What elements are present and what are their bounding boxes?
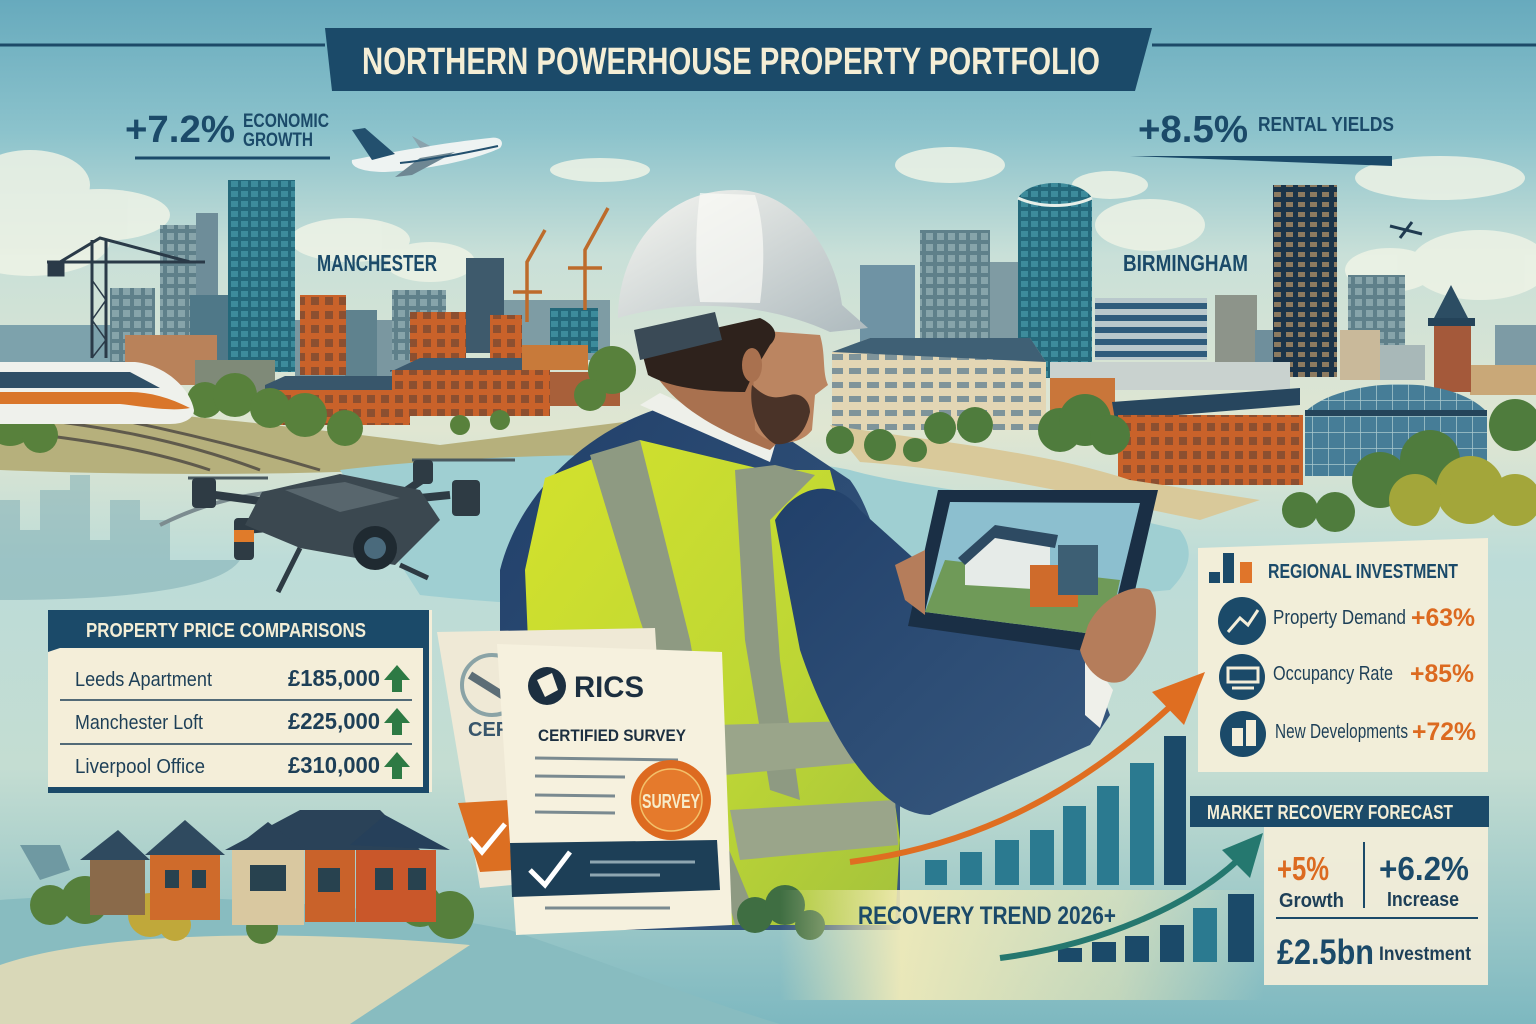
Birmingham skyline [826,183,1536,532]
title banner: NORTHERN POWERHOUSE PROPERTY PORTFOLIO [362,41,1100,83]
stat: economic growth [125,109,330,158]
bar chart: lower bars [1058,894,1254,962]
label: Manchester: MANCHESTER [317,250,437,276]
stat: economic growth: ECONOMIC [243,111,329,132]
stat: economic growth: GROWTH [243,130,313,151]
stat: increase: Increase [1387,889,1459,911]
row: property demand: +63% [1411,604,1475,632]
raised arm sleeve [775,489,1110,815]
icon: airplane [352,128,502,177]
icon: high-speed train [0,362,194,424]
band: recovery trend label: RECOVERY TREND 2026+ [858,902,1116,930]
panel heading: REGIONAL INVESTMENT [1268,561,1458,583]
row: occupancy rate: +85% [1410,660,1474,688]
panel heading: PROPERTY PRICE COMPARISONS [86,620,366,642]
stat: growth: +5% [1277,850,1329,887]
document heading: CERTIFIED SURVEY [538,726,687,745]
stat: increase [1379,850,1469,911]
row: Manchester: Manchester Loft [75,712,203,734]
jacket body [500,408,900,930]
stat: investment [1277,933,1472,972]
neck and head [640,318,828,450]
seal: survey [631,760,711,840]
teal glass tower [228,180,295,372]
ground and track [0,400,640,474]
houses illustration [0,810,780,1024]
icon: bar chart [1209,553,1252,583]
dark tower [1273,185,1337,377]
distant towers left [0,213,610,385]
cylindrical teal tower [1018,183,1092,378]
arrow: teal recovery trend [1000,833,1263,958]
row: new developments: New Developments [1275,721,1408,743]
orange blocks [300,295,346,375]
panel: regional investment [1198,538,1488,772]
trees [0,346,636,453]
tablet device [895,490,1158,683]
orange campus building [1050,362,1303,485]
stat: rental yields: RENTAL YIELDS [1258,114,1394,136]
office tower [920,230,990,342]
stat: economic growth: +7.2% [125,109,235,151]
stat: rental yields: +8.5% [1138,109,1248,151]
icon: drone [160,460,515,592]
worker figure [500,190,1113,930]
RICS logo [528,667,644,705]
clouds [0,147,1536,300]
distant towers right [860,262,1536,395]
Manchester skyline [0,180,640,474]
hard hat [618,190,868,360]
row: Liverpool: Liverpool Office [75,756,205,778]
stat: rental yields [1130,109,1394,166]
row: property demand: Property Demand [1273,607,1406,629]
tree beside vest [737,885,825,940]
label: Birmingham: BIRMINGHAM [1123,250,1248,276]
stat: increase: +6.2% [1379,850,1469,887]
stat: growth [1277,850,1344,912]
row: occupancy rate [1219,654,1474,700]
shirt cuff [1085,650,1113,728]
faded skyline left [0,475,240,600]
front document: RICS certified survey [497,644,732,935]
title banner [0,28,1536,91]
stat: investment: £2.5bn [1277,933,1374,972]
check band [510,840,720,897]
brick warehouses [125,335,217,385]
high-vis vest [525,440,900,925]
row: occupancy rate: Occupancy Rate [1273,663,1393,685]
blue office block [1095,298,1207,360]
panel: property price comparisons [48,610,432,792]
panel: market recovery forecast [1190,796,1489,985]
icon: bird [1390,222,1422,238]
panel heading: MARKET RECOVERY FORECAST [1207,802,1453,824]
stat: growth: Growth [1279,890,1344,912]
row: Leeds: Leeds Apartment [75,669,212,691]
back document: CERT [468,719,522,741]
bar chart: upper rising bars [925,736,1186,885]
low cream building [832,338,1046,430]
row: Manchester: £225,000 [288,708,380,734]
row: Leeds [75,665,410,692]
row: Liverpool [75,752,410,779]
row: new developments [1220,711,1476,757]
row: property demand [1218,597,1475,645]
row: Leeds: £185,000 [288,665,380,691]
row: Manchester [75,708,410,735]
shirt collar [640,393,775,462]
hands [1080,588,1156,683]
RICS logo: RICS [574,671,644,704]
clock tower [1428,285,1475,392]
glass hall [1305,384,1487,476]
arrow: orange growth trend [850,672,1205,862]
river [340,455,1189,609]
landscaping [826,394,1536,532]
band: recovery trend label [780,890,1264,1000]
row: new developments: +72% [1412,718,1476,746]
seal: survey: SURVEY [642,791,700,813]
back document [437,628,670,888]
construction cranes [513,208,608,322]
icon: tower crane [47,238,205,358]
stat: investment: Investment [1379,944,1472,965]
row: Liverpool: £310,000 [288,752,380,778]
